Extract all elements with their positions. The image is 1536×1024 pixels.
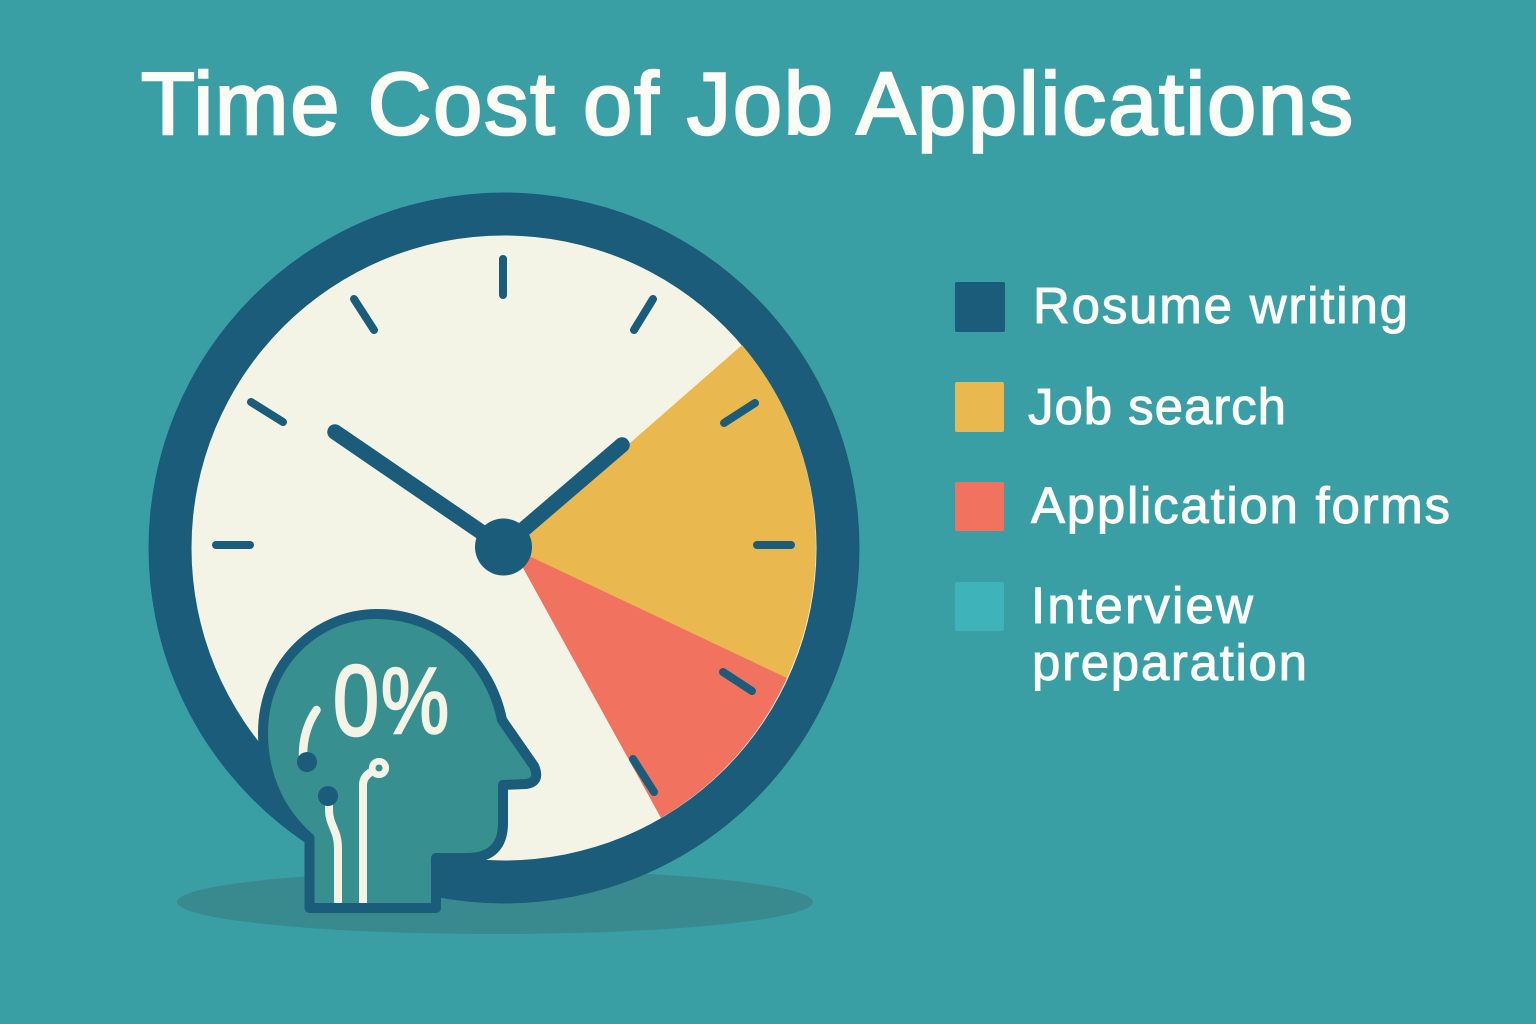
legend item: job search: Job search [1028,378,1286,435]
wedge: application forms [512,548,787,818]
clock hub [475,518,532,576]
hour hand [503,445,622,547]
minute hand [335,432,503,547]
circuit trace right [363,770,375,903]
zero percent label [333,645,449,757]
head silhouette [263,614,536,908]
circuit ring [372,761,386,775]
legend item: application forms: Application forms [1031,477,1450,534]
wedge: job search [510,345,816,678]
clock face [192,236,816,860]
circuit node middle [318,786,338,806]
clock rim [148,192,860,904]
circuit trace left [303,710,316,755]
legend item: interview preparation: preparation [1032,634,1307,691]
ground shadow [177,870,813,934]
legend item: resume writing: Rosume writing [1033,277,1408,334]
clock [148,192,860,904]
circuit node left [297,752,317,772]
circuit trace middle [329,800,338,903]
zero percent label: % [381,648,449,753]
legend item: interview preparation [955,577,1307,691]
zero percent label: 0 [333,645,379,757]
legend item: interview preparation: Interview [1031,577,1253,634]
tick marks [216,259,791,792]
icon: head with circuit [263,614,536,908]
legend [955,277,1450,691]
title: Time Cost of Job Applications [141,54,1353,153]
